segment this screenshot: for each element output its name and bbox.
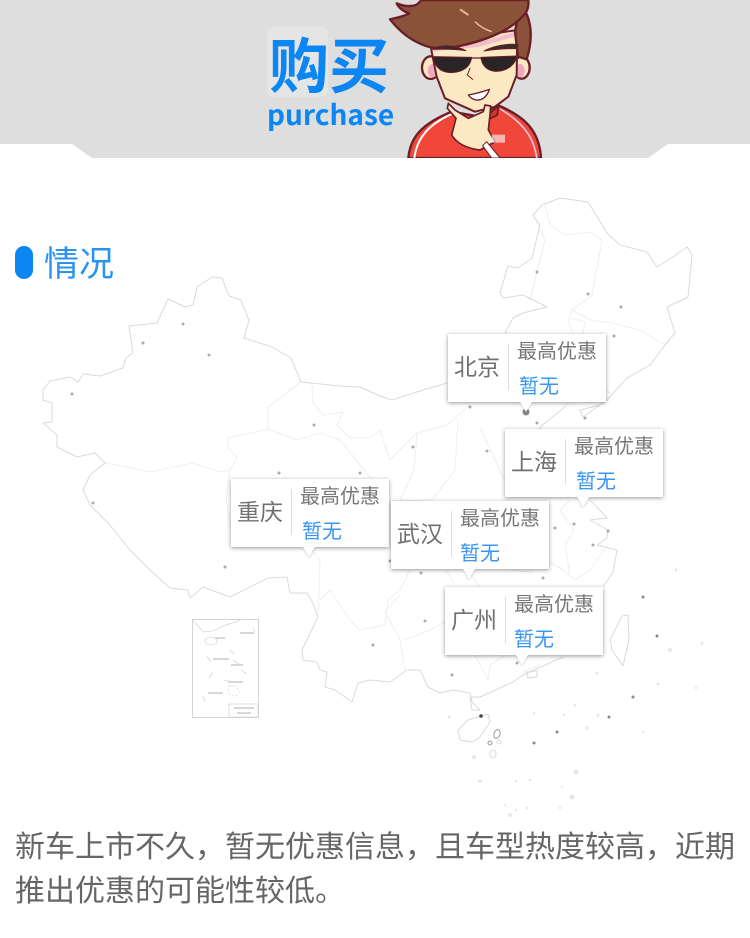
callout: 重庆: 暂无 bbox=[302, 515, 342, 544]
icon: cartoon mascot with sunglasses bbox=[388, 0, 542, 158]
callout: 武汉: 暂无 bbox=[460, 537, 500, 566]
callout: 武汉 bbox=[391, 501, 549, 569]
inset: South China Sea islands map bbox=[192, 619, 259, 718]
callout: 广州: 广州 bbox=[451, 601, 497, 635]
callout: 重庆: 最高优惠 bbox=[300, 480, 380, 509]
callout: 上海 bbox=[505, 429, 663, 497]
national outline bbox=[212, 198, 692, 440]
callout: 重庆: 重庆 bbox=[237, 493, 283, 527]
title icon backing bbox=[267, 27, 328, 97]
subtitle: purchase: purchase bbox=[267, 94, 394, 134]
body text: 新车上市不久，暂无优惠信息，且车型热度较高，近期 bbox=[15, 822, 735, 866]
callout: 广州: 暂无 bbox=[514, 623, 554, 652]
section marker pill bbox=[15, 246, 33, 279]
callout: 重庆 bbox=[231, 479, 389, 547]
callout: 北京 bbox=[448, 334, 606, 402]
callout: 北京: 暂无 bbox=[519, 370, 559, 399]
section title text: 情况 bbox=[44, 236, 114, 287]
title: 购买: 购买 bbox=[269, 19, 389, 106]
Hainan, Taiwan and islets bbox=[458, 714, 490, 742]
callout: 广州: 最高优惠 bbox=[514, 588, 594, 617]
callout: 北京: 最高优惠 bbox=[517, 335, 597, 364]
body text bbox=[15, 822, 735, 910]
callout: 武汉: 最高优惠 bbox=[460, 502, 540, 531]
callout: 上海: 最高优惠 bbox=[574, 430, 654, 459]
body text: 推出优惠的可能性较低。 bbox=[15, 866, 345, 910]
callout: 上海: 上海 bbox=[511, 443, 557, 477]
section heading: 情况 bbox=[15, 236, 114, 287]
callout: 武汉: 武汉 bbox=[397, 515, 443, 549]
callout: 上海: 暂无 bbox=[576, 465, 616, 494]
callout: 北京: 北京 bbox=[454, 348, 500, 382]
header band bbox=[0, 0, 750, 158]
callout: 广州 bbox=[445, 587, 603, 655]
city dots bbox=[70, 270, 658, 744]
